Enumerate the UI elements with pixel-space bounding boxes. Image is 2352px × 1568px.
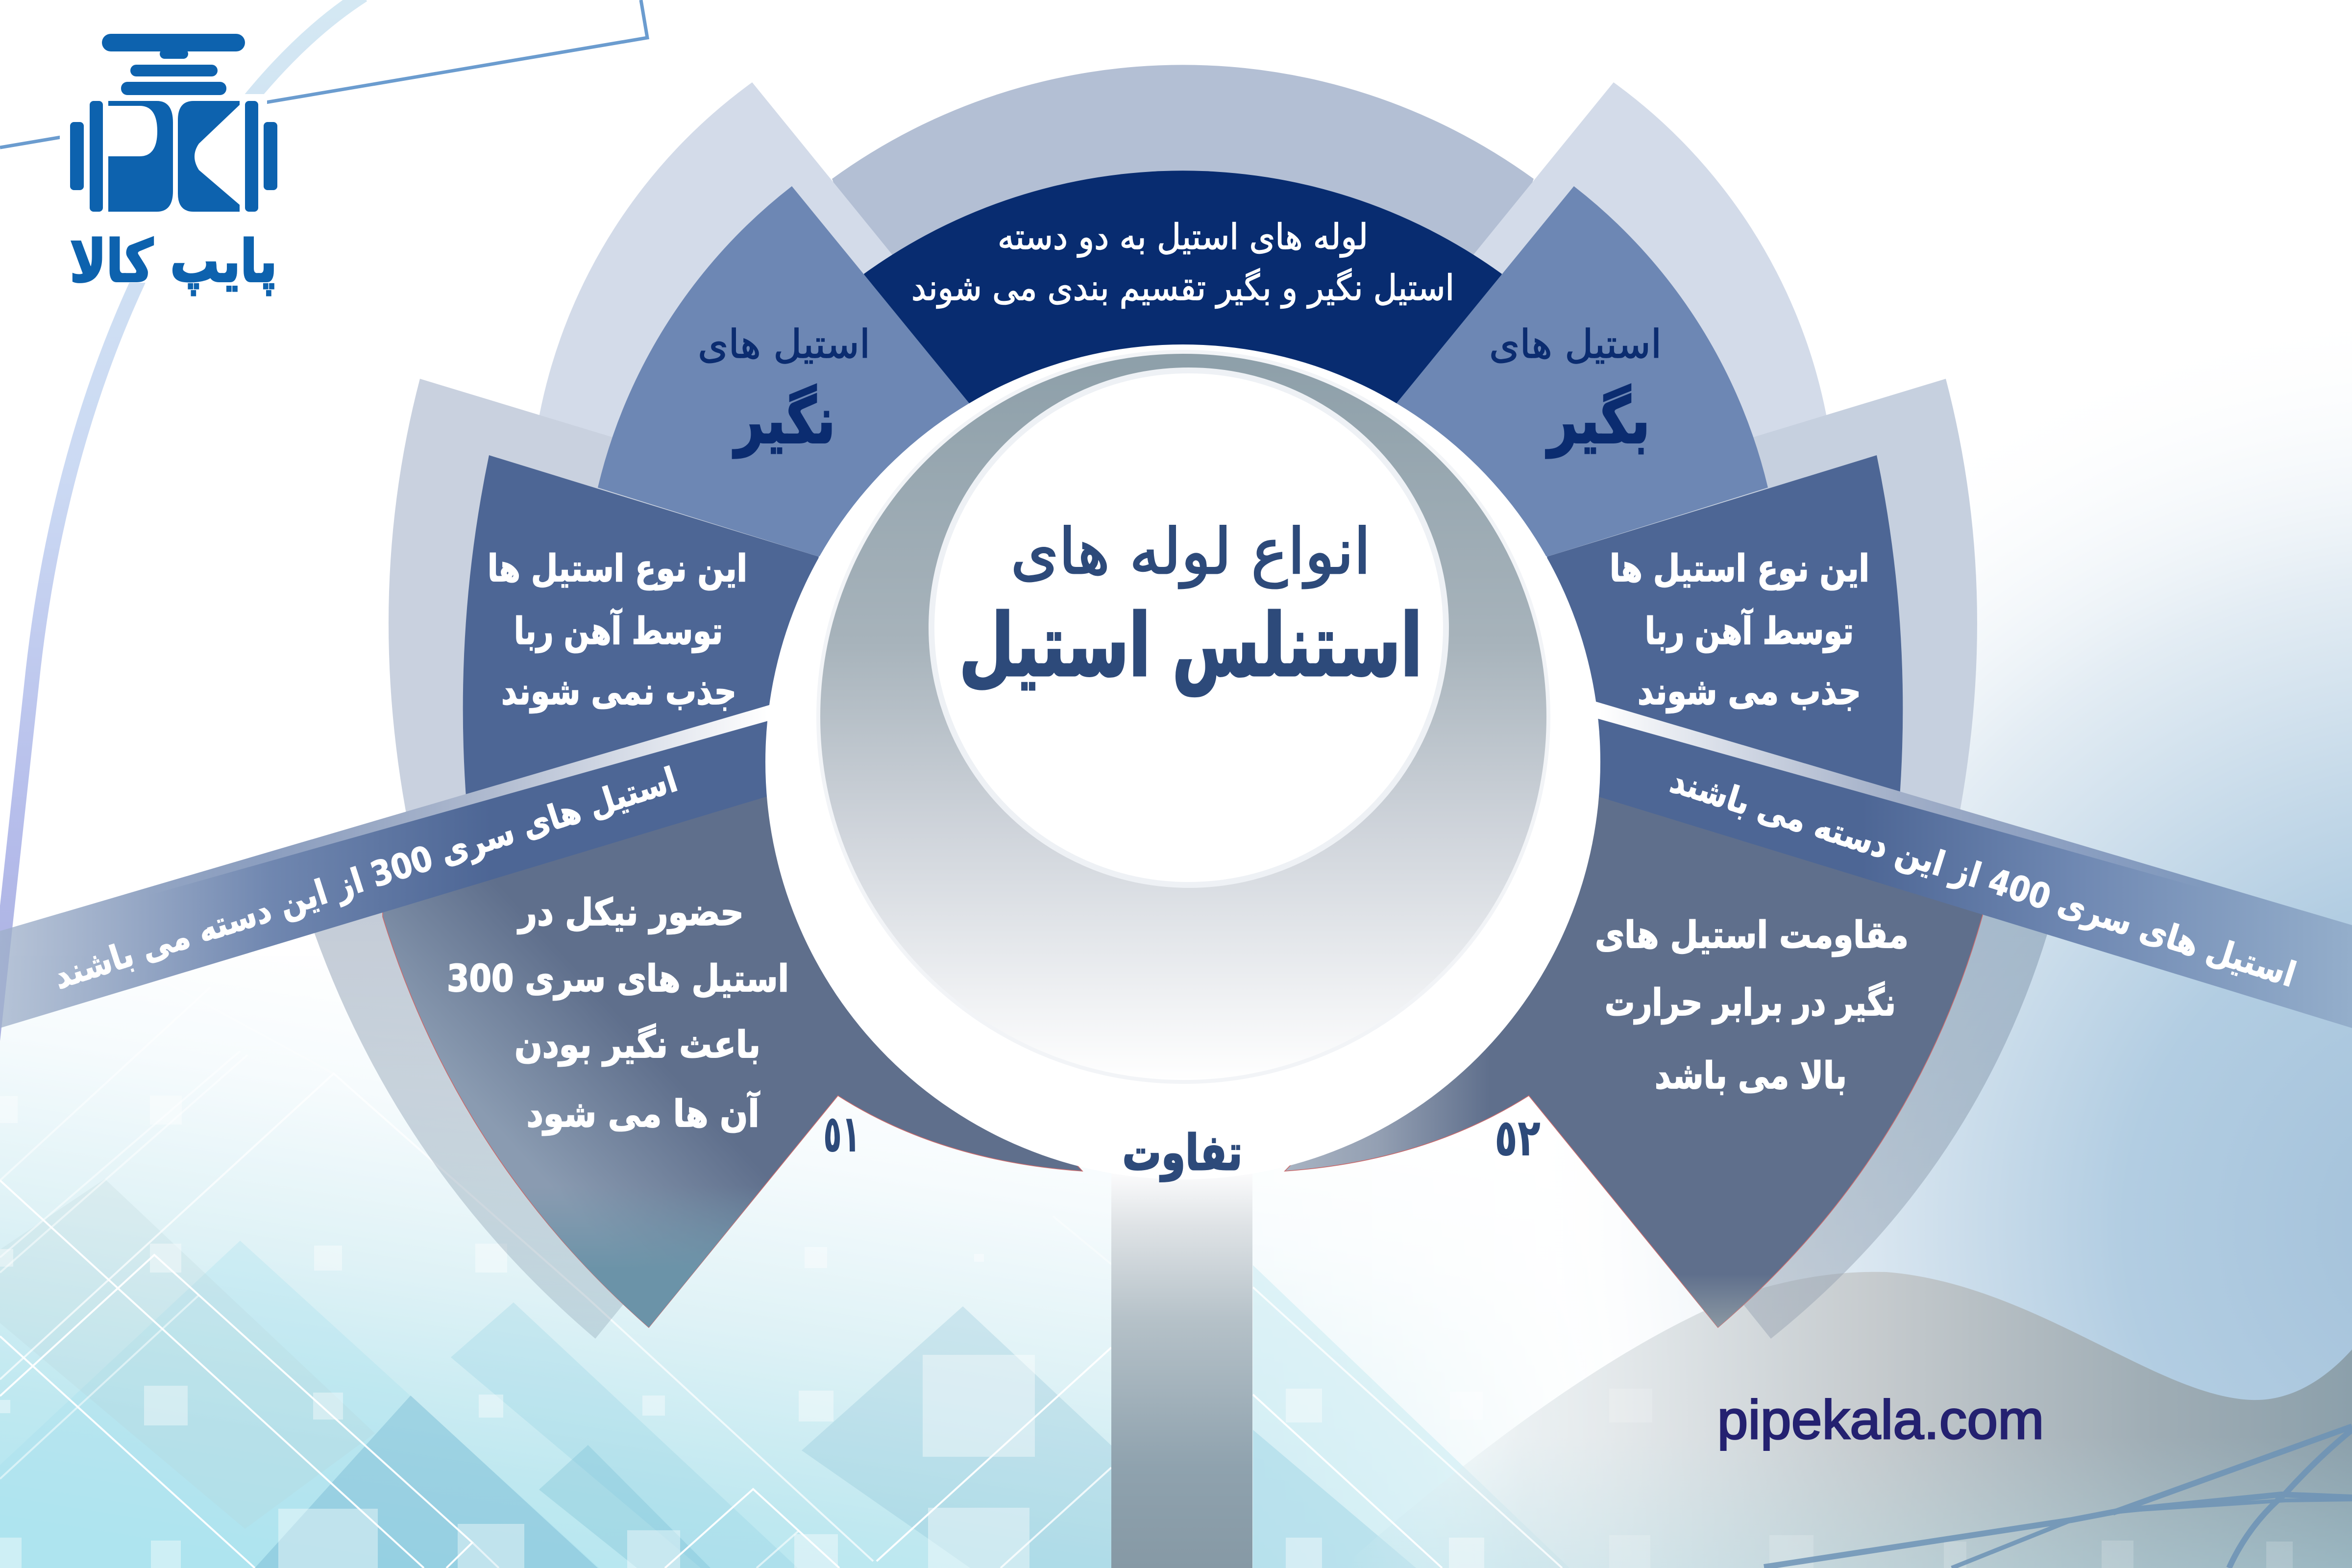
lower left text [447, 890, 789, 1136]
begir heading: بگیر [1545, 383, 1650, 458]
right description text: جذب می شوند [1638, 669, 1861, 713]
right ribbon text: استیل های سری 400 از این دسته می باشند [1666, 760, 2301, 995]
left description text [488, 546, 747, 713]
left description text: جذب نمی شوند [501, 669, 736, 713]
panel: upper petals back layer right [1386, 82, 1832, 539]
lower left text: باعث نگیر بودن [514, 1023, 760, 1067]
left description text: توسط آهن ربا [514, 608, 723, 653]
difference label: تفاوت [1122, 1124, 1243, 1182]
ribbon stripe left [147, 701, 784, 896]
panel: nagir petal [598, 186, 1004, 557]
begir label: استیل های [1489, 321, 1662, 367]
right description text [1610, 546, 1869, 713]
grey ring [818, 352, 1548, 1082]
ribbon stripe right [1583, 698, 2215, 892]
lower right text [1595, 913, 1909, 1097]
bottom pillar [1111, 1110, 1252, 1568]
background: blue curved lines [1764, 1426, 2352, 1568]
number 02: ٥٢ [1494, 1108, 1541, 1168]
logo wordmark: پایپ کالا [70, 227, 277, 295]
lower right text: مقاومت استیل های [1595, 913, 1909, 957]
left description text: این نوع استیل ها [488, 546, 747, 590]
band: right ribbon [1583, 698, 2352, 1028]
lower left text: حضور نیکل در [517, 890, 744, 934]
nagir label: استیل های [698, 321, 870, 367]
decorative swoosh [0, 0, 363, 1063]
white hub circle [765, 344, 1600, 1179]
right description text: این نوع استیل ها [1610, 546, 1869, 590]
lower crescent left [313, 882, 632, 1339]
panel: left description [463, 455, 819, 833]
panel: lower left petal [383, 787, 1082, 1327]
background: white pattern lines [0, 980, 1562, 1568]
website url: pipekala.com [1717, 1389, 2044, 1450]
left ribbon text: استیل های سری 300 از این دسته می باشند [49, 760, 682, 997]
panel: lower right petal [1285, 789, 1983, 1327]
inner white circle [931, 370, 1446, 885]
lower right text: بالا می باشد [1655, 1054, 1847, 1097]
logo [70, 34, 277, 295]
top outer arc [832, 65, 1534, 539]
decorative thin frame line [0, 0, 647, 147]
white mask behind logo [60, 94, 267, 283]
title line 1: انواع لوله های [1010, 515, 1371, 589]
background: grey wave [1352, 1272, 2352, 1568]
title line 2: استنلس استیل [959, 596, 1422, 696]
band: left ribbon [0, 701, 784, 1028]
panel: top dark band [864, 171, 1502, 539]
lower crescent right [1735, 882, 2061, 1339]
panel: right description [1547, 455, 1903, 833]
lower left text: استیل های سری 300 [447, 956, 789, 1001]
right description text: توسط آهن ربا [1645, 608, 1854, 653]
lower left text: آن ها می شود [526, 1091, 760, 1136]
lower right text: نگیر در برابر حرارت [1605, 980, 1896, 1025]
number 01: ٥١ [823, 1104, 860, 1164]
nagir heading: نگیر [733, 383, 835, 458]
panel: second layer right [1547, 379, 1977, 833]
panel: upper petals back layer left [534, 82, 980, 539]
background: pattern squares [0, 1096, 2293, 1568]
top band text line 1: لوله های استیل به دو دسته [998, 216, 1368, 258]
panel: second layer left [389, 379, 819, 833]
background: teal gradient [0, 1020, 1489, 1568]
background: teal geometric shapes [0, 1179, 1569, 1568]
panel: begir petal [1361, 186, 1768, 557]
top band text line 2: استیل نگیر و بگیر تقسیم بندی می شوند [911, 267, 1454, 309]
